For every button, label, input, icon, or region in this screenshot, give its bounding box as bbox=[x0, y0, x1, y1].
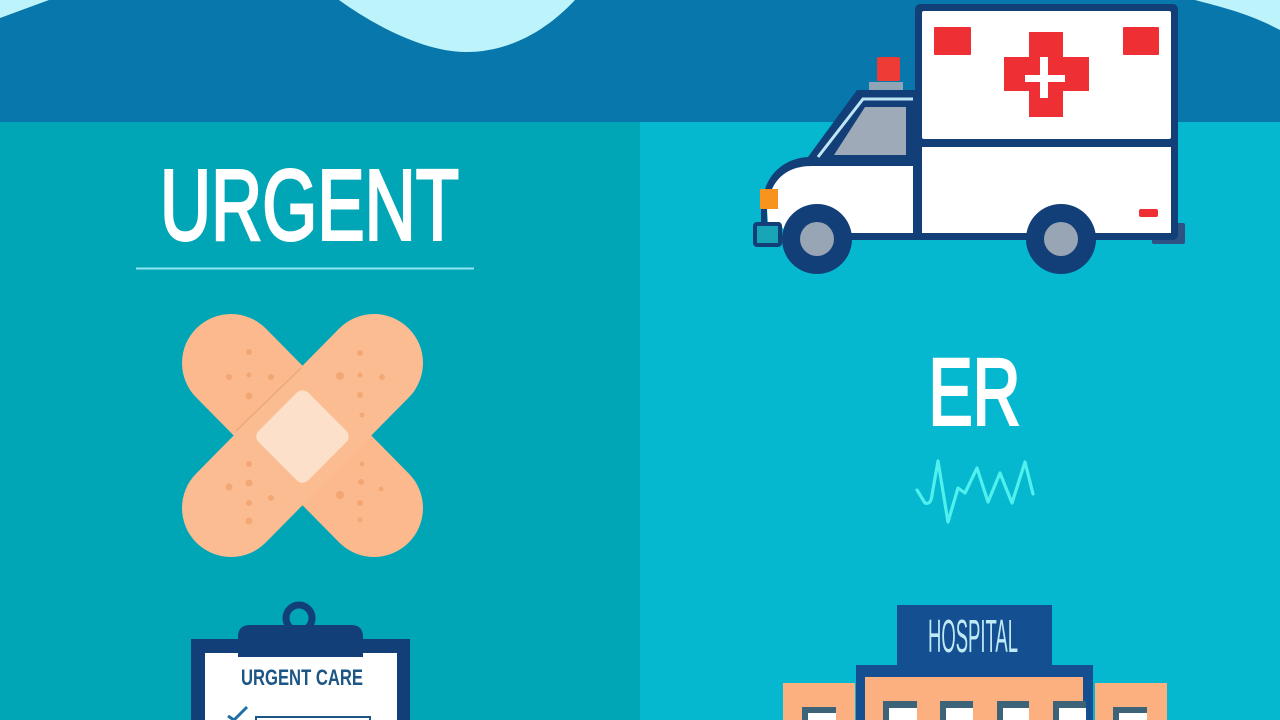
header wave band bbox=[0, 0, 1280, 122]
cab body bbox=[767, 166, 913, 233]
front bumper bbox=[755, 224, 780, 245]
red side lights bbox=[934, 27, 1159, 217]
left wing bbox=[783, 683, 855, 720]
panel: urgent care background bbox=[0, 122, 640, 720]
icon: hospital building: HOSPITAL bbox=[928, 610, 1018, 662]
clipboard list line bbox=[256, 717, 370, 720]
panel: ER background bbox=[640, 122, 1280, 720]
clipboard label: URGENT CARE bbox=[241, 665, 363, 690]
icon: crossed bandages bbox=[226, 349, 385, 524]
rear bumper bbox=[1152, 223, 1185, 244]
windshield trim bbox=[818, 99, 913, 157]
cab outline bbox=[765, 90, 915, 238]
right wing bbox=[1095, 683, 1167, 720]
icon: urgent care clipboard bbox=[191, 605, 410, 720]
windows bbox=[802, 701, 1147, 720]
beacon base bbox=[869, 82, 903, 90]
roof beacon bbox=[877, 57, 900, 81]
heading: ER: ER bbox=[928, 340, 1020, 446]
icon: hospital building bbox=[783, 605, 1167, 720]
lower box panel bbox=[922, 147, 1171, 233]
cab window bbox=[834, 107, 906, 155]
icon: heartbeat line bbox=[917, 461, 1033, 522]
clipboard check mark bbox=[228, 707, 247, 720]
white inner plus bbox=[1025, 57, 1065, 98]
heading: URGENT: URGENT bbox=[160, 150, 459, 262]
box outline bbox=[915, 4, 1178, 240]
upper box panel bbox=[922, 11, 1171, 139]
central block bbox=[856, 665, 1093, 720]
divider under URGENT heading bbox=[136, 268, 474, 270]
front wheel bbox=[782, 204, 852, 274]
rear wheel bbox=[1026, 204, 1096, 274]
icon: ambulance bbox=[755, 4, 1185, 274]
red medical cross bbox=[1004, 32, 1089, 117]
headlight bbox=[760, 189, 778, 209]
hospital sign bbox=[897, 605, 1052, 665]
